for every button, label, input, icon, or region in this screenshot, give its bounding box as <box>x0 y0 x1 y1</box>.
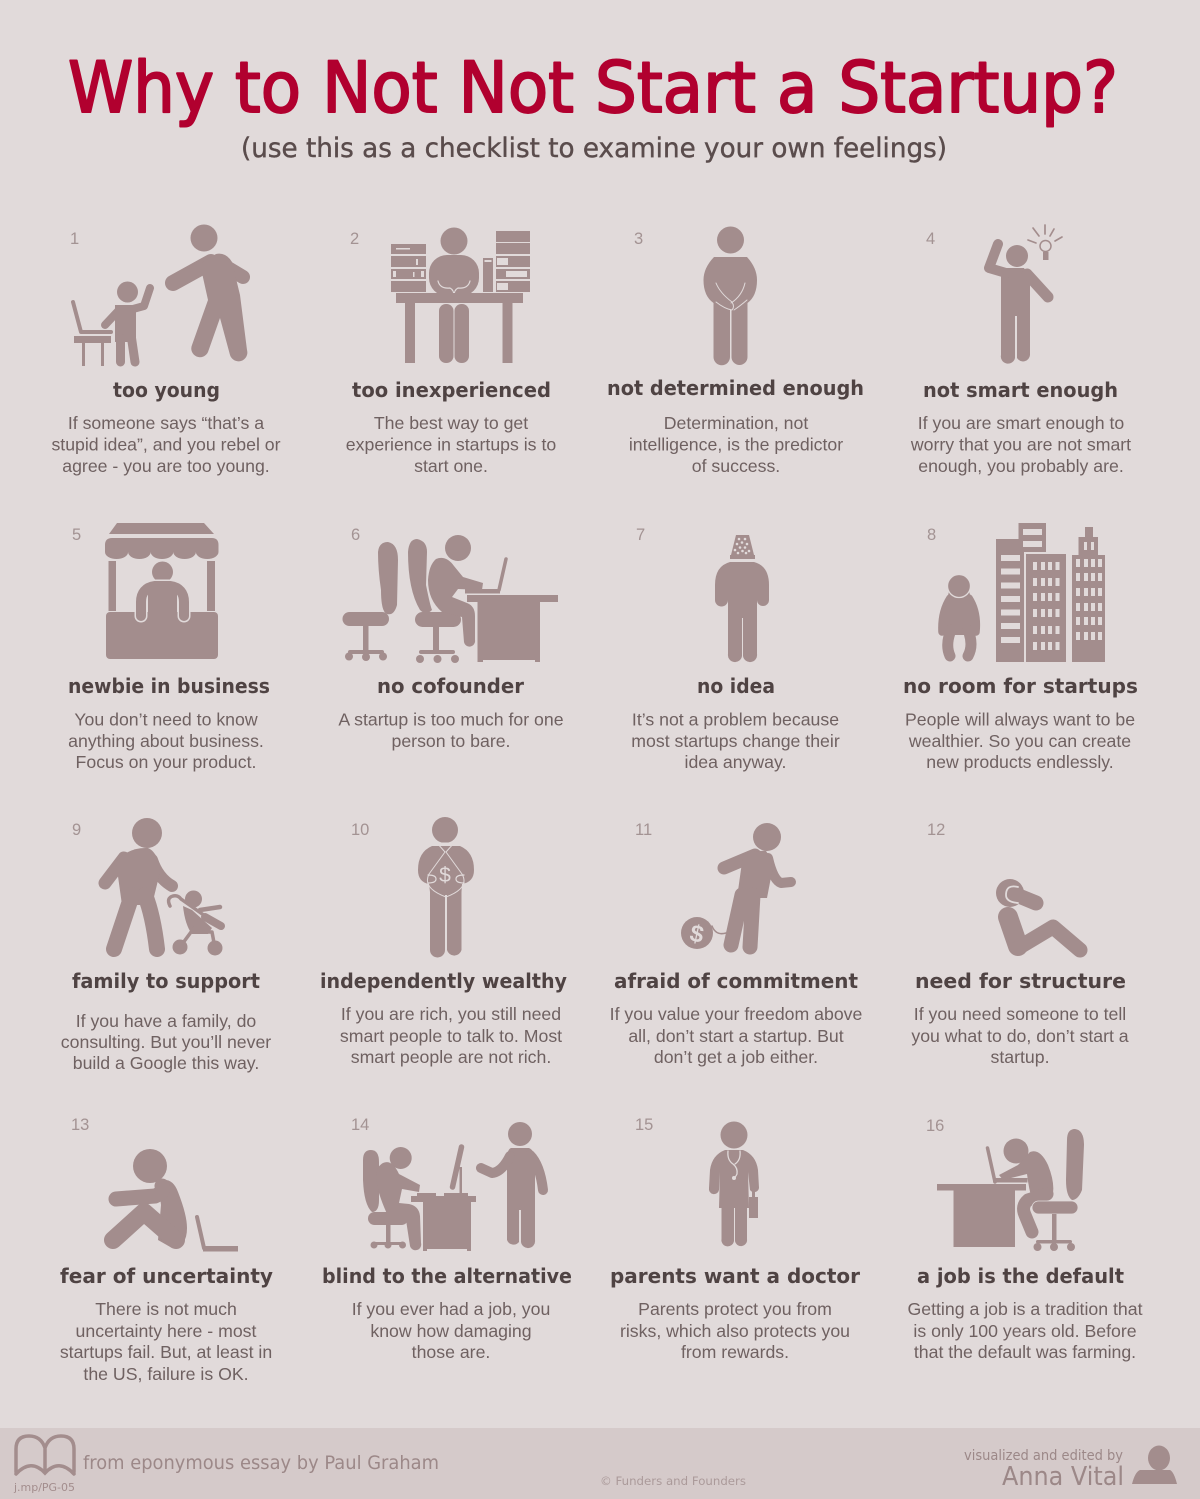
panel 2: too inexperienced <box>346 228 556 476</box>
description 6: person to bare. <box>392 731 510 751</box>
number 5: 5 <box>72 526 81 544</box>
icon: worker at desk and standing boss <box>363 1122 543 1251</box>
description 13: startups fail. But, at least in <box>60 1342 272 1362</box>
title: Why to Not Not Start a Startup? <box>68 47 1118 129</box>
icon: open book <box>16 1436 74 1474</box>
number 12: 12 <box>927 821 945 839</box>
panel 7: no idea <box>631 526 840 772</box>
description 10: smart people to talk to. Most <box>340 1026 562 1046</box>
description 3: intelligence, is the predictor <box>629 434 843 454</box>
panel 1: too young <box>51 224 281 476</box>
number 14: 14 <box>351 1116 369 1134</box>
description 9: If you have a family, do <box>76 1011 256 1031</box>
description 6: A startup is too much for one <box>338 710 564 730</box>
heading 5: newbie in business <box>68 674 270 698</box>
description 10: smart people are not rich. <box>351 1047 551 1067</box>
description 11: all, don’t start a startup. But <box>628 1026 844 1046</box>
number 9: 9 <box>72 821 81 839</box>
icon: hunched person beside skyscrapers <box>942 523 1105 662</box>
description 15: Parents protect you from <box>638 1299 832 1319</box>
description 4: If you are smart enough to <box>918 413 1124 433</box>
description 12: If you need someone to tell <box>914 1004 1126 1024</box>
footer source text: from eponymous essay by Paul Graham <box>83 1452 439 1474</box>
panel 5: newbie in business <box>68 523 270 772</box>
description 13: There is not much <box>95 1299 237 1319</box>
icon: person slumped over desk <box>937 1129 1084 1251</box>
description 15: from rewards. <box>681 1342 789 1362</box>
heading 10: independently wealthy <box>320 969 567 993</box>
copyright: © Funders and Founders <box>600 1474 746 1488</box>
heading 15: parents want a doctor <box>610 1264 861 1288</box>
heading 13: fear of uncertainty <box>60 1264 273 1288</box>
number 16: 16 <box>926 1117 944 1135</box>
description 8: People will always want to be <box>905 710 1135 730</box>
description 14: know how damaging <box>370 1321 532 1341</box>
description 13: uncertainty here - most <box>76 1321 257 1341</box>
number 6: 6 <box>351 526 360 544</box>
heading 3: not determined enough <box>607 376 864 400</box>
description 5: anything about business. <box>68 731 264 751</box>
description 1: stupid idea”, and you rebel or <box>51 434 281 454</box>
panel 10: independently wealthy <box>320 817 567 1067</box>
heading 11: afraid of commitment <box>614 969 858 993</box>
author name: Anna Vital <box>1002 1462 1124 1492</box>
description 7: idea anyway. <box>685 752 786 772</box>
heading 4: not smart enough <box>923 378 1118 402</box>
description 11: don’t get a job either. <box>654 1047 818 1067</box>
panel 9: family to support <box>61 818 271 1073</box>
icon: person with ball and chain <box>681 823 791 949</box>
number 1: 1 <box>70 230 79 248</box>
description 16: is only 100 years old. Before <box>913 1321 1137 1341</box>
number 11: 11 <box>635 821 652 839</box>
panel 8: no room for startups <box>903 523 1138 772</box>
icon: doctor with stethoscope and briefcase <box>709 1122 759 1246</box>
heading 6: no cofounder <box>377 674 525 698</box>
icon: person pushing stroller <box>105 818 222 956</box>
description 16: Getting a job is a tradition that <box>908 1299 1143 1319</box>
number 7: 7 <box>636 526 645 544</box>
description 16: that the default was farming. <box>914 1342 1136 1362</box>
description 14: If you ever had a job, you <box>352 1299 550 1319</box>
heading 8: no room for startups <box>903 674 1138 698</box>
description 13: the US, failure is OK. <box>83 1364 249 1384</box>
icon: person at desk with books <box>391 228 530 363</box>
description 4: worry that you are not smart <box>910 434 1131 454</box>
icon: person with ball and chain: $ <box>687 920 707 949</box>
number 2: 2 <box>350 230 359 248</box>
icon: author silhouette <box>1132 1446 1177 1484</box>
description 1: If someone says “that’s a <box>68 413 264 433</box>
heading 14: blind to the alternative <box>322 1264 572 1288</box>
panel 14: blind to the alternative <box>322 1116 572 1362</box>
number 13: 13 <box>71 1116 89 1134</box>
number 8: 8 <box>927 526 936 544</box>
description 2: The best way to get <box>374 413 528 433</box>
description 9: build a Google this way. <box>73 1053 259 1073</box>
panel 13: fear of uncertainty <box>60 1116 273 1384</box>
description 5: Focus on your product. <box>76 752 256 772</box>
description 10: If you are rich, you still need <box>341 1004 561 1024</box>
panel 6: no cofounder <box>338 526 564 751</box>
description 8: new products endlessly. <box>926 752 1114 772</box>
panel 4: not smart enough <box>910 225 1131 476</box>
description 14: those are. <box>412 1342 490 1362</box>
description 15: risks, which also protects you <box>620 1321 850 1341</box>
description 3: Determination, not <box>664 413 808 433</box>
heading 2: too inexperienced <box>352 378 551 402</box>
icon: person with thimble for a head <box>715 535 769 662</box>
heading 9: family to support <box>72 969 260 993</box>
description 12: startup. <box>990 1047 1050 1067</box>
icon: person with folded hands <box>704 226 757 365</box>
description 11: If you value your freedom above <box>610 1004 863 1024</box>
short link: j.mp/PG-05 <box>13 1482 75 1494</box>
description 2: start one. <box>414 456 488 476</box>
panel 3: not determined enough <box>607 226 864 476</box>
description 3: of success. <box>692 456 780 476</box>
heading 7: no idea <box>697 674 775 698</box>
credit line: visualized and edited by <box>964 1448 1123 1464</box>
heading 12: need for structure <box>915 969 1126 993</box>
panel 11: afraid of commitment <box>610 821 863 1067</box>
icon: person hugging knees beside laptop <box>113 1149 238 1252</box>
description 9: consulting. But you’ll never <box>61 1032 271 1052</box>
panel 16: a job is the default <box>908 1117 1143 1362</box>
number 15: 15 <box>635 1116 653 1134</box>
description 2: experience in startups is to <box>346 434 556 454</box>
number 10: 10 <box>351 821 369 839</box>
number 4: 4 <box>926 230 935 248</box>
panel 12: need for structure <box>911 821 1129 1067</box>
description 12: you what to do, don’t start a <box>911 1026 1129 1046</box>
description 7: It’s not a problem because <box>632 710 839 730</box>
description 5: You don’t need to know <box>74 710 258 730</box>
icon: person clutching money bag: $ <box>439 864 451 887</box>
heading 1: too young <box>113 378 220 402</box>
description 4: enough, you probably are. <box>918 456 1124 476</box>
icon: person clutching money bag <box>418 817 474 958</box>
heading 16: a job is the default <box>917 1264 1124 1288</box>
description 7: most startups change their <box>631 731 840 751</box>
panel 15: parents want a doctor <box>610 1116 861 1362</box>
icon: person doing sit-ups <box>996 879 1080 950</box>
description 8: wealthier. So you can create <box>908 731 1131 751</box>
description 1: agree - you are too young. <box>62 456 270 476</box>
subtitle: (use this as a checklist to examine your own feelings) <box>241 133 947 164</box>
number 3: 3 <box>634 230 643 248</box>
icon: market stall <box>105 523 218 659</box>
footer band <box>0 1428 1200 1499</box>
icon: empty chair and worker at desk <box>342 535 558 663</box>
icon: adult pulling child from laptop <box>73 224 247 366</box>
icon: person with lightbulb <box>989 225 1062 364</box>
